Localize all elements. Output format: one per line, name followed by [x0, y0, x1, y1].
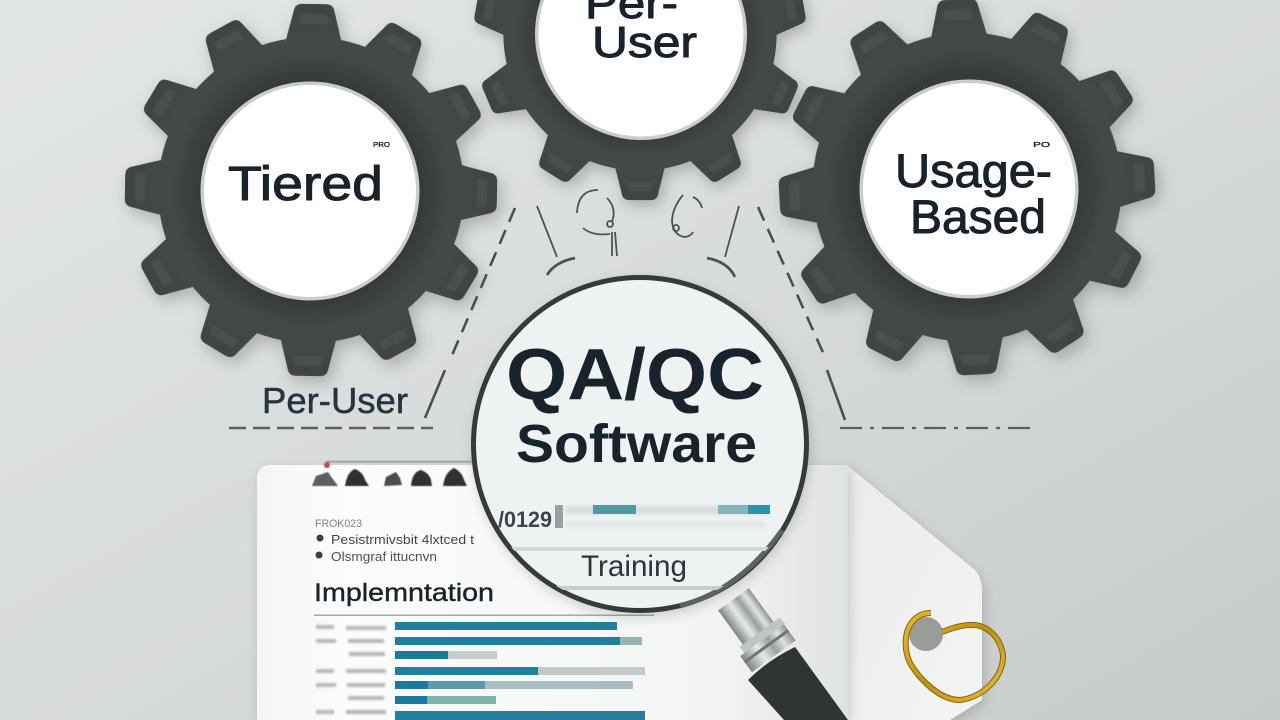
- document row labels: [316, 625, 386, 714]
- lens divider bands: [500, 547, 770, 551]
- lens training label: Training: [581, 550, 687, 583]
- dashed rule: right: [840, 427, 1037, 429]
- gear: usage-based: [773, 0, 1161, 381]
- document fold panel: [840, 466, 982, 720]
- handle grip: [748, 647, 848, 720]
- dashed connector: left: [425, 208, 515, 418]
- handle neck: [711, 583, 796, 672]
- document header thumbnails: [312, 461, 472, 486]
- document code label: FROK023: [315, 518, 362, 530]
- sketch marks between gears: [537, 190, 739, 277]
- document rule: [314, 614, 654, 616]
- document main sheet: [257, 465, 848, 720]
- gear: usage-based: Based: [910, 190, 1046, 243]
- magnifying glass lens: [474, 278, 806, 610]
- document: implementation report: [257, 461, 982, 720]
- document bullet list: Pesistrmivsbit 4lxtced t: [331, 532, 474, 547]
- document heading: Implemntation: [314, 579, 494, 607]
- gear: per-user: [475, 0, 805, 197]
- document bullet list: [316, 532, 474, 564]
- gear: usage-based: PO: [1033, 142, 1051, 149]
- left label: per-user: Per-User: [262, 380, 408, 421]
- gear: usage-based: Usage-: [895, 144, 1052, 197]
- gold key ring: [906, 613, 1003, 700]
- lens title: QA/QC: [506, 335, 764, 415]
- gear: tiered: [125, 4, 497, 376]
- dashed connector: right: [758, 207, 845, 420]
- magnifying glass handle: [711, 583, 848, 720]
- dashed rule: left: [229, 427, 433, 429]
- gear: tiered: Tiered: [228, 158, 383, 211]
- lens date code: /0129: [498, 507, 552, 532]
- lens blurred data row: [555, 505, 770, 528]
- document bullet list: Olsmgraf ittucnvn: [331, 549, 437, 564]
- lens subtitle: Software: [516, 414, 757, 474]
- gear: tiered: PRO: [373, 142, 391, 149]
- gear: per-user: User: [592, 18, 697, 67]
- document gantt bars: [395, 622, 645, 720]
